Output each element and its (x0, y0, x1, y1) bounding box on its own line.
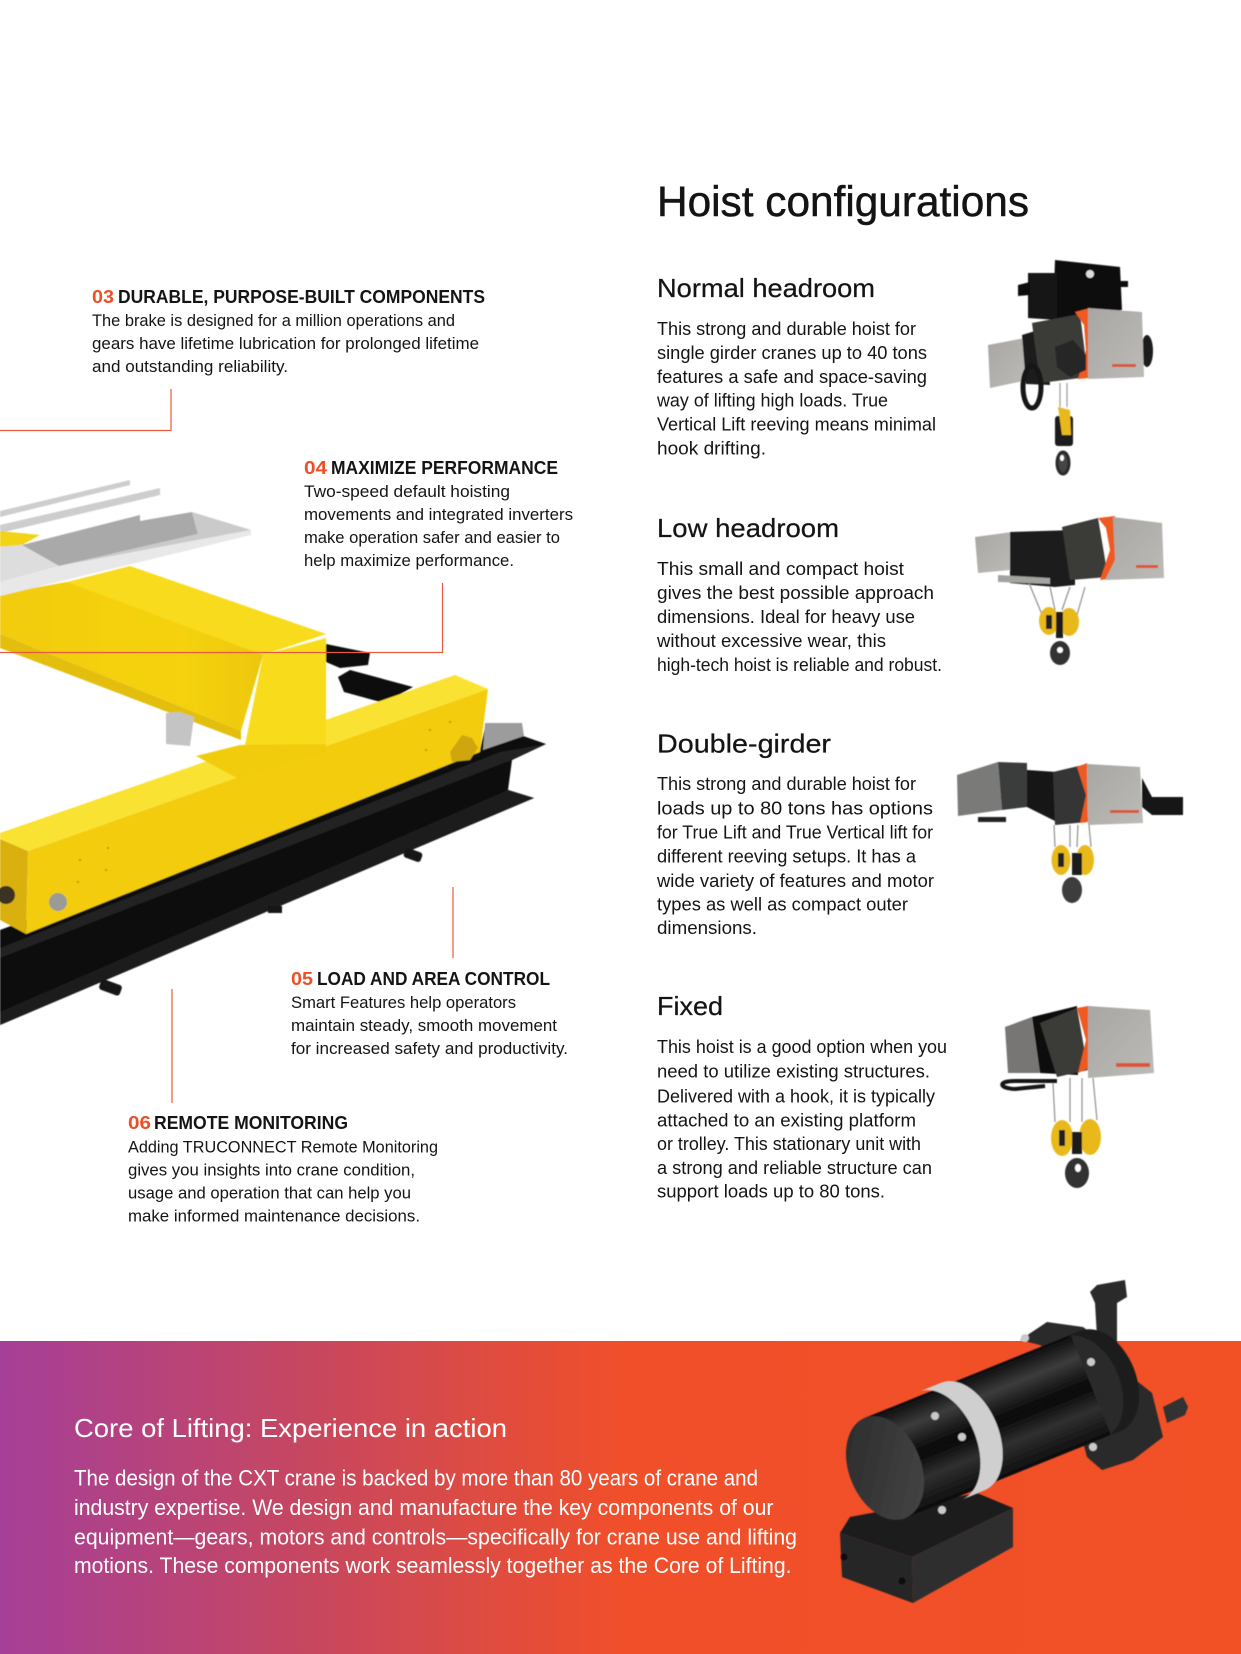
motor cylinder (830, 1314, 1155, 1535)
callout 06: gives you insights into crane condition, (128, 1162, 415, 1180)
callout 05: maintain steady, smooth movement (291, 1017, 557, 1035)
callout 06: Adding TRUCONNECT Remote Monitoring (128, 1138, 438, 1156)
section: fixed: support loads up to 80 tons. (657, 1182, 885, 1202)
control box (840, 1493, 1013, 1603)
hoist: double-girder (957, 762, 1183, 903)
section: double-girder: dimensions. (657, 918, 757, 938)
section: double-girder: wide variety of features and motor (656, 871, 934, 891)
section: fixed: or trolley. This stationary unit with (657, 1134, 921, 1154)
section: low headroom: This small and compact hoist (657, 559, 904, 579)
section: normal headroom: This strong and durable hoist for (657, 319, 916, 339)
section: double-girder: different reeving setups. It has a (657, 846, 917, 866)
callout line 03 (0, 389, 171, 430)
callout 04: make operation safer and easier to (304, 529, 560, 547)
rail (483, 723, 524, 750)
callout 06: REMOTE MONITORING (154, 1113, 348, 1133)
section: low headroom: without excessive wear, this (656, 631, 886, 651)
section: fixed: Fixed (657, 991, 723, 1021)
section: fixed (657, 991, 947, 1202)
panel text: equipment—gears, motors and controls—specifically for crane use and lifting (74, 1524, 797, 1550)
callout 06: make informed maintenance decisions. (128, 1208, 420, 1226)
section: normal headroom: hook drifting. (657, 438, 766, 458)
section: double-girder: This strong and durable hoist for (657, 774, 916, 794)
icon: gear motor (830, 1280, 1188, 1603)
section: normal headroom: Vertical Lift reeving means minimal (657, 414, 936, 434)
crane illustration (0, 480, 546, 1025)
panel text: The design of the CXT crane is backed by more than 80 years of crane and (74, 1466, 758, 1490)
hoist: fixed (1002, 1006, 1154, 1188)
girder pegs (98, 847, 423, 996)
callout 06 (128, 1113, 438, 1226)
section: double-girder: types as well as compact outer (657, 894, 908, 914)
main beam (0, 566, 326, 778)
section: double-girder: loads up to 80 tons has options (657, 798, 933, 818)
callout 05: LOAD AND AREA CONTROL (317, 969, 550, 989)
section: double-girder: for True Lift and True Vertical lift for (657, 822, 933, 842)
gear housing (1020, 1280, 1188, 1470)
section: normal headroom: Normal headroom (657, 273, 875, 303)
section: low headroom: dimensions. Ideal for heavy use (657, 607, 915, 627)
callout 04: movements and integrated inverters (304, 506, 573, 524)
section: normal headroom: single girder cranes up to 40 tons (657, 343, 927, 363)
hoist: low headroom (975, 516, 1164, 665)
section: normal headroom (656, 273, 936, 458)
panel text (74, 1466, 797, 1578)
callout 04 (304, 458, 573, 570)
section: normal headroom: way of lifting high loads. True (656, 390, 888, 410)
callout 04: 04 (304, 458, 327, 478)
callout 06: usage and operation that can help you (128, 1184, 411, 1202)
callout 05: Smart Features help operators (291, 994, 516, 1012)
section: low headroom (656, 513, 942, 675)
callout 03: and outstanding reliability. (92, 358, 288, 376)
section: fixed: This hoist is a good option when you (657, 1037, 947, 1057)
callout 06: 06 (128, 1113, 151, 1133)
panel text: motions. These components work seamlessly together as the Core of Lifting. (74, 1553, 792, 1578)
bolts (931, 1334, 1097, 1514)
section: fixed: need to utilize existing structures. (657, 1062, 930, 1082)
title: Hoist configurations (657, 178, 1029, 226)
panel: core of lifting (0, 1280, 1241, 1654)
callout line 04 (0, 583, 442, 652)
callout 04: Two-speed default hoisting (304, 483, 510, 501)
section: double-girder (656, 728, 934, 938)
section: normal headroom: features a safe and space-saving (657, 367, 927, 387)
section: low headroom: gives the best possible approach (657, 583, 934, 603)
callout line 06 (171, 989, 173, 1103)
callout 03 (92, 287, 485, 376)
section: fixed: attached to an existing platform (657, 1110, 916, 1130)
callout 03: 03 (92, 287, 114, 307)
callout 04: help maximize performance. (304, 552, 514, 570)
callout 05 (291, 969, 568, 1058)
callout line 05 (452, 887, 454, 958)
section: double-girder: Double-girder (657, 728, 831, 758)
gearbox motor behind beam (326, 644, 413, 703)
runway girder (0, 723, 546, 1025)
callout 05: 05 (291, 969, 313, 989)
section: low headroom: Low headroom (657, 513, 839, 543)
section: fixed: a strong and reliable structure can (657, 1158, 932, 1178)
callout 05: for increased safety and productivity. (291, 1040, 568, 1058)
end truck (0, 675, 488, 934)
callout 03: DURABLE, PURPOSE-BUILT COMPONENTS (118, 287, 485, 307)
panel heading: Core of Lifting: Experience in action (74, 1413, 507, 1443)
panel text: industry expertise. We design and manufacture the key components of our (74, 1495, 774, 1520)
callout 03: gears have lifetime lubrication for prolonged lifetime (92, 335, 479, 353)
beam clamp (166, 712, 194, 746)
hoist: normal headroom (988, 260, 1153, 474)
callout 04: MAXIMIZE PERFORMANCE (331, 458, 558, 478)
callout 03: The brake is designed for a million operations and (92, 312, 455, 330)
rails and tray (0, 480, 251, 596)
section: low headroom: high-tech hoist is reliable and robust. (657, 655, 942, 675)
section: fixed: Delivered with a hook, it is typically (657, 1086, 935, 1106)
